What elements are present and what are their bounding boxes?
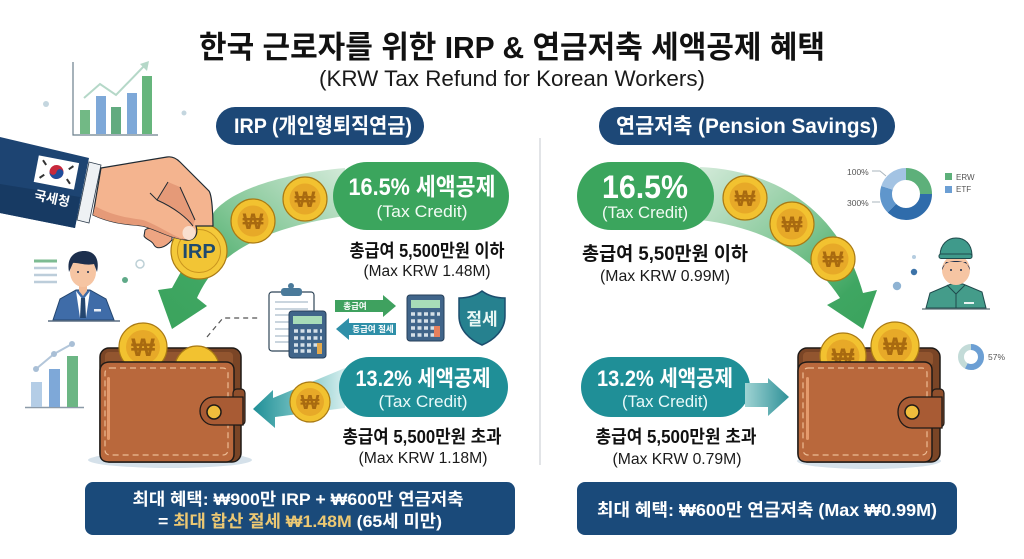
icon: right wallet coins: ₩ <box>832 344 855 371</box>
icon: coin right 1: ₩ <box>735 186 756 211</box>
panel: 13.2% left: (Tax Credit) <box>378 392 468 411</box>
icon: side chart <box>25 341 84 408</box>
text: right upper condition: 총급여 5,50만원 이하 <box>582 243 748 265</box>
panel divider <box>539 138 541 465</box>
text: left upper condition: 총급여 5,500만원 이하 <box>350 241 505 261</box>
arrow: gross pay tax saving: 동급여 절세 <box>352 324 394 334</box>
icon: coin right 1 <box>723 176 767 220</box>
subtitle: (KRW Tax Refund for Korean Workers) <box>319 66 705 91</box>
icon: right wallet coins <box>820 322 919 379</box>
donut chart: ERW ETF: 100% <box>847 167 869 177</box>
icon: clipboard with calculator <box>269 283 326 358</box>
panel: 13.2% left: 13.2% 세액공제 <box>356 366 490 391</box>
text: right upper condition: (Max KRW 0.99M) <box>600 268 730 285</box>
arrow: gross pay tax saving <box>336 318 396 340</box>
icon: left wallet <box>88 323 252 468</box>
text: left upper condition: (Max KRW 1.48M) <box>364 263 490 280</box>
arrow: teal arrow to right wallet <box>745 378 789 416</box>
icon: coin 1 <box>283 177 327 221</box>
icon: coin right 3 <box>811 237 855 281</box>
icon: coin 2: ₩ <box>243 209 264 234</box>
donut chart: 57%: 57% <box>988 352 1005 362</box>
panel: 16.5% right: 16.5% <box>602 169 688 205</box>
icon: calculator <box>407 295 444 341</box>
text: right lower condition <box>596 427 757 468</box>
pill heading: pension savings: 연금저축 (Pension Savings) <box>616 115 878 138</box>
icon: tax saving shield <box>459 291 505 345</box>
icon: tax saving shield: 절세 <box>466 310 498 329</box>
title: 한국 근로자를 위한 IRP & 연금저축 세액공제 혜택 <box>199 30 825 65</box>
panel: 16.5% left <box>333 162 509 230</box>
callout: left maximum benefit <box>85 482 515 535</box>
donut chart: ERW ETF: ERW <box>956 173 975 182</box>
icon: hand with NTS sleeve: 국세청 <box>33 187 71 210</box>
panel: 16.5% left: (Tax Credit) <box>376 202 468 221</box>
callout: right maximum benefit: 최대 혜택: ₩600만 연금저축 (Max ₩0.99M) <box>597 500 937 520</box>
callout: right maximum benefit <box>577 482 957 535</box>
icon: coin teal left: ₩ <box>301 392 320 414</box>
panel: 13.2% left <box>339 357 508 417</box>
icon: right wallet coins: ₩ <box>883 333 907 361</box>
callout: left maximum benefit: 최대 혜택: ₩900만 IRP + ₩600만 연금저축 <box>132 490 464 509</box>
icon: coin 1: ₩ <box>295 187 316 212</box>
panel: 13.2% right <box>581 357 750 417</box>
icon: right wallet <box>797 322 944 469</box>
icon: coin 2 <box>231 199 275 243</box>
icon: IRP coin: IRP <box>182 241 216 263</box>
icon: office worker <box>34 251 144 321</box>
pill heading: IRP <box>216 107 424 145</box>
icon: coin right 2 <box>770 202 814 246</box>
dashed connector <box>207 318 258 337</box>
icon: coin right 2: ₩ <box>782 212 803 237</box>
icon: hand with NTS sleeve <box>0 137 213 248</box>
callout: left maximum benefit: = 최대 합산 절세 ₩1.48M (65세 미만) <box>158 512 442 531</box>
icon: growth bar chart <box>43 61 186 135</box>
text: right upper condition <box>582 243 748 285</box>
donut chart: 57% <box>961 347 1005 367</box>
arrow: green curved arrow to right wallet <box>700 167 877 329</box>
panel: 13.2% right: (Tax Credit) <box>622 392 708 411</box>
icon: wallet coins <box>119 323 219 390</box>
donut chart: ERW ETF: 300% <box>847 198 869 208</box>
pill heading: IRP: IRP (개인형퇴직연금) <box>234 115 412 138</box>
arrow: teal arrow to left wallet <box>253 368 345 428</box>
icon: IRP coin <box>171 223 227 279</box>
panel: 16.5% left: 16.5% 세액공제 <box>348 174 496 201</box>
panel: 16.5% right: (Tax Credit) <box>602 203 688 222</box>
arrow: gross pay: 총급여 <box>343 301 367 311</box>
text: left lower condition: 총급여 5,500만원 초과 <box>342 427 502 447</box>
icon: wallet coins: ₩ <box>131 334 155 362</box>
pill heading: pension savings <box>599 107 895 145</box>
arrow: green curved arrow to left wallet <box>158 168 345 329</box>
icon: worker with helmet <box>893 238 990 309</box>
panel: 16.5% right <box>577 162 714 230</box>
text: left lower condition: (Max KRW 1.18M) <box>358 450 488 467</box>
icon: coin right 3: ₩ <box>823 247 844 272</box>
arrow: gross pay <box>335 295 396 317</box>
text: right lower condition: (Max KRW 0.79M) <box>612 451 742 468</box>
donut chart: ERW ETF: ETF <box>956 185 971 194</box>
panel: 13.2% right: 13.2% 세액공제 <box>597 366 733 391</box>
icon: Korean flag patch <box>34 155 79 190</box>
text: left upper condition <box>350 241 505 280</box>
text: left lower condition <box>342 427 502 467</box>
icon: coin teal left <box>290 382 330 422</box>
donut chart: ERW ETF <box>847 167 975 214</box>
text: right lower condition: 총급여 5,500만원 초과 <box>596 427 757 447</box>
